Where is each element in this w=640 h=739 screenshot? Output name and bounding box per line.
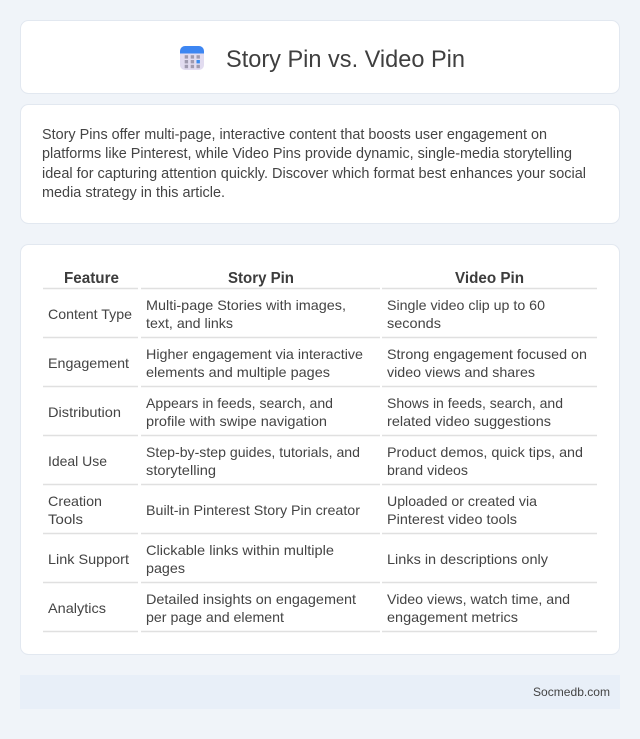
- row: link support: Links in descriptions only: [387, 551, 548, 567]
- intro text: Story Pins offer multi-page, interactive content that boosts user engagement on: [42, 127, 547, 143]
- row: analytics: per page and element: [146, 609, 284, 625]
- row: creation tools: Tools: [48, 511, 83, 527]
- row: creation tools: Pinterest video tools: [387, 511, 517, 527]
- panel: intro: [20, 104, 620, 224]
- footer bar: [20, 675, 620, 709]
- row: analytics: Detailed insights on engagement: [146, 591, 356, 607]
- table header row: Story Pin: [228, 270, 294, 287]
- row: ideal use: [48, 444, 583, 478]
- row: distribution: Distribution: [48, 404, 121, 420]
- row: ideal use: Ideal Use: [48, 453, 107, 469]
- intro text: [42, 127, 586, 201]
- row: creation tools: [48, 493, 537, 527]
- row: ideal use: Step-by-step guides, tutorials, and: [146, 444, 360, 460]
- footer source text: Socmedb.com: [533, 685, 610, 699]
- row: ideal use: brand videos: [387, 462, 468, 478]
- table header row: Video Pin: [455, 270, 524, 287]
- row: link support: pages: [146, 560, 185, 576]
- row: analytics: Video views, watch time, and: [387, 591, 570, 607]
- table header row: [64, 270, 524, 287]
- row: distribution: Appears in feeds, search, and: [146, 395, 333, 411]
- row: engagement: elements and multiple pages: [146, 364, 330, 380]
- row: engagement: [48, 346, 587, 380]
- row: engagement: video views and shares: [387, 364, 535, 380]
- row: distribution: profile with swipe navigation: [146, 413, 327, 429]
- row: content type: Multi-page Stories with images,: [146, 297, 346, 313]
- row: analytics: [48, 591, 570, 625]
- row: content type: text, and links: [146, 315, 233, 331]
- row: link support: Clickable links within multiple: [146, 542, 334, 558]
- row: creation tools: Uploaded or created via: [387, 493, 537, 509]
- row: ideal use: storytelling: [146, 462, 216, 478]
- panel: title header: [20, 20, 620, 94]
- intro text: platforms like Pinterest, while Video Pins provide dynamic, single-media storytelling: [42, 146, 572, 162]
- row: analytics: engagement metrics: [387, 609, 518, 625]
- row: content type: seconds: [387, 315, 441, 331]
- row: distribution: related video suggestions: [387, 413, 551, 429]
- row: ideal use: Product demos, quick tips, and: [387, 444, 583, 460]
- row: engagement: Engagement: [48, 355, 129, 371]
- row: creation tools: Built-in Pinterest Story Pin creator: [146, 502, 360, 518]
- table header row: Feature: [64, 270, 119, 287]
- row: link support: [48, 542, 548, 576]
- row: distribution: [48, 395, 563, 429]
- row: content type: Content Type: [48, 306, 132, 322]
- row: content type: Single video clip up to 60: [387, 297, 545, 313]
- intro text: media strategy in this article.: [42, 185, 225, 201]
- row: analytics: Analytics: [48, 600, 106, 616]
- row: distribution: Shows in feeds, search, and: [387, 395, 563, 411]
- row: creation tools: Creation: [48, 493, 102, 509]
- row: engagement: Higher engagement via interactive: [146, 346, 363, 362]
- icon: calendar: [180, 46, 204, 70]
- intro text: ideal for capturing attention quickly. Discover which format best enhances your social: [42, 166, 586, 182]
- row: content type: [48, 297, 545, 331]
- row: engagement: Strong engagement focused on: [387, 346, 587, 362]
- row: link support: Link Support: [48, 551, 129, 567]
- title: Story Pin vs. Video Pin: [226, 46, 465, 73]
- panel: comparison table: [20, 244, 620, 654]
